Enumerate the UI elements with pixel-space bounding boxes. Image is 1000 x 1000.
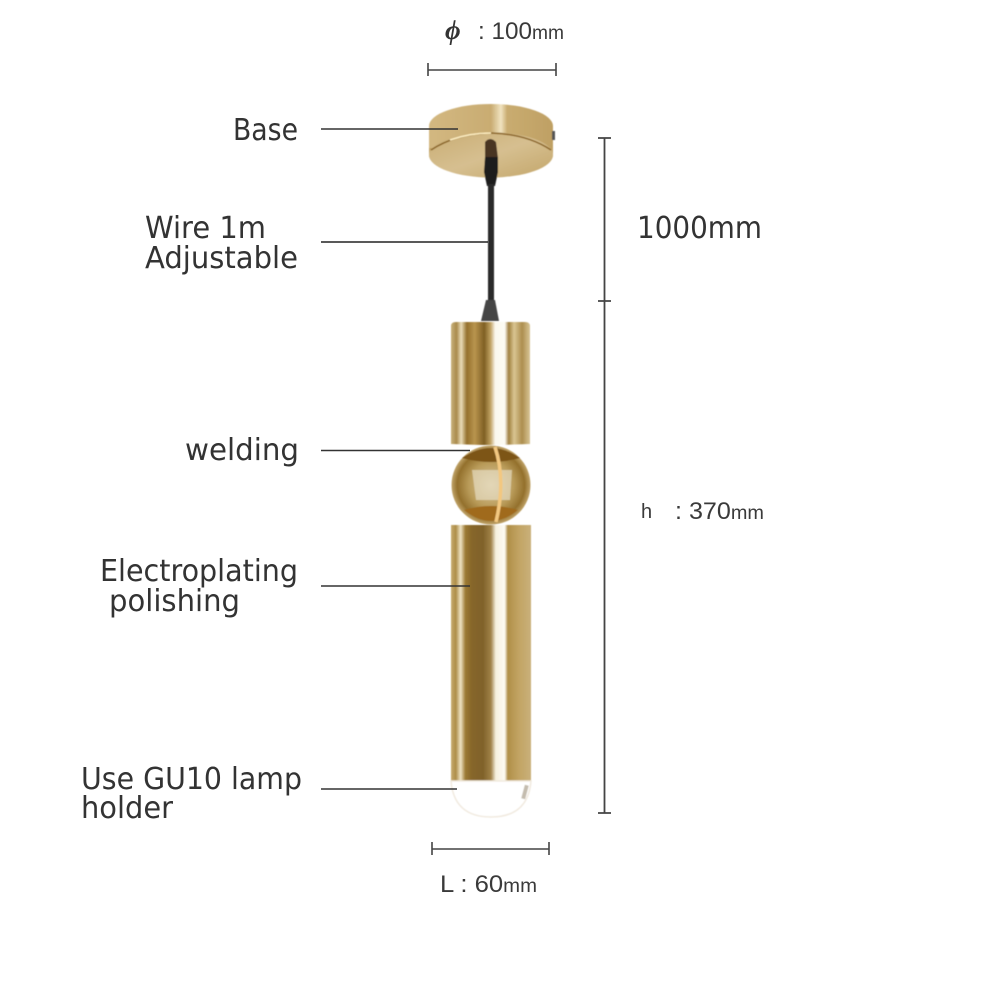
label: Wire 1m Adjustable	[145, 211, 298, 276]
dimension: length bar	[432, 842, 549, 855]
label: Electroplating polishing: Electroplating	[100, 554, 298, 589]
leader line: base	[321, 128, 458, 130]
label: Electroplating polishing	[100, 554, 298, 619]
leader line: lamp holder	[321, 788, 457, 790]
dimension: diameter label: : 100mm	[478, 18, 564, 45]
label: Use GU10 lamp holder: holder	[81, 791, 174, 826]
lamp base canopy	[429, 104, 555, 178]
lamp glass dome	[451, 781, 531, 817]
dimension: diameter label: ϕ	[445, 15, 461, 45]
label: Electroplating polishing: polishing	[109, 584, 240, 619]
label: h 370mm: h	[641, 501, 652, 523]
label: welding: welding	[185, 433, 299, 468]
label: 1000mm: 1000mm	[637, 211, 762, 246]
lamp: pendant illustration	[429, 104, 555, 817]
leader line: wire	[321, 241, 488, 243]
lamp upper cylinder	[451, 322, 530, 445]
label: Wire 1m Adjustable: Adjustable	[145, 241, 298, 276]
leader line: welding	[321, 450, 470, 452]
label: Base: Base	[233, 113, 298, 148]
label: Use GU10 lamp holder	[81, 762, 302, 826]
lamp sphere	[452, 446, 530, 524]
dimension: diameter bar	[428, 63, 556, 76]
dimension: diameter label	[445, 15, 564, 45]
label: L 60mm: L : 60mm	[440, 871, 537, 898]
dimension: vertical 1000mm and 370mm bar	[598, 138, 611, 813]
leader line: electroplating	[321, 585, 470, 587]
lamp lower cylinder	[451, 525, 531, 781]
label: Wire 1m Adjustable: Wire 1m	[145, 211, 266, 246]
lamp wire	[481, 139, 499, 321]
label: h 370mm: : 370mm	[675, 498, 764, 525]
label: Use GU10 lamp holder: Use GU10 lamp	[81, 762, 302, 797]
